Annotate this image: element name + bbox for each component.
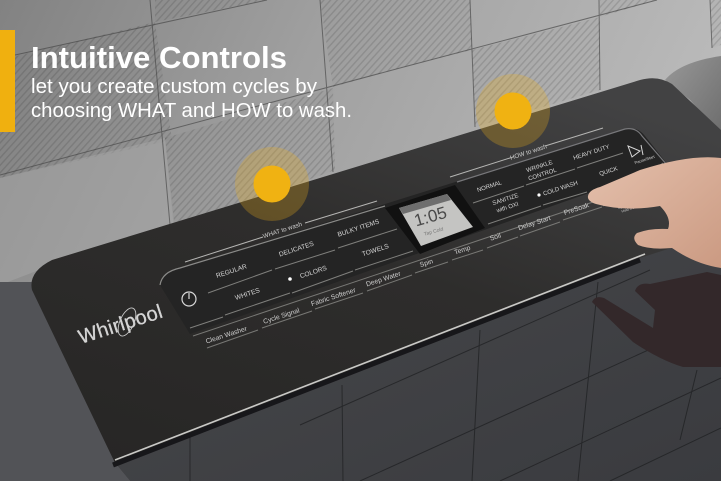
function buttons row: Clean Washer: [205, 325, 249, 346]
pressing hand: [588, 157, 721, 268]
function buttons row: Cycle Signal: [262, 307, 301, 326]
subtitle: [31, 75, 352, 122]
icon: power button: [182, 292, 196, 306]
subtitle: choosing WHAT and HOW to wash.: [31, 99, 352, 122]
HOW to wash section: WRINKLE: [526, 160, 554, 174]
start pause label: Pause/Start: [634, 154, 656, 165]
function buttons row: Delay Start: [517, 215, 552, 232]
WHAT to wash section: REGULAR: [215, 263, 248, 280]
function buttons row: Spin: [419, 258, 434, 269]
wall tiles background: [0, 0, 721, 300]
HOW to wash section: NORMAL: [477, 180, 503, 194]
display time: 1:05: [412, 203, 449, 230]
display bezel: [385, 185, 485, 254]
LCD display: Tap Cold: [423, 226, 444, 238]
function buttons row: Temp: [454, 245, 472, 256]
HOW to wash section: COLD WASH: [543, 181, 579, 197]
control strip recess: [160, 128, 668, 334]
HOW to wash section: CONTROL: [528, 167, 558, 182]
gray washer lid, right: [665, 56, 721, 135]
section heading: WHAT to wash: WHAT to wash: [262, 221, 303, 240]
function buttons row: Hold 3 sec: [621, 204, 639, 214]
washer lower body tiles: [0, 220, 721, 481]
HOW to wash section: with OXI: [495, 202, 520, 215]
title: Intuitive Controls: [31, 40, 287, 75]
function buttons row: [193, 163, 663, 348]
HOW to wash section: [450, 128, 667, 224]
hotspot: what to wash: [235, 147, 309, 221]
Whirlpool logo: Whirlpool: [76, 301, 165, 349]
WHAT to wash section: [160, 201, 413, 328]
yellow accent bar: [0, 30, 15, 132]
WHAT to wash section: TOWELS: [361, 243, 390, 258]
control panel body: [31, 78, 721, 463]
function buttons row: Fabric Softener: [310, 287, 357, 308]
function buttons row: Soil: [489, 232, 502, 243]
hand reflection: [592, 272, 721, 367]
hotspot: how to wash: [476, 74, 550, 148]
panel chrome front edge: [113, 254, 645, 465]
WHAT to wash section: COLORS: [299, 265, 328, 280]
function buttons row: Cycle Signal: [618, 200, 638, 210]
LCD display: [399, 194, 473, 246]
WHAT to wash section: WHITES: [234, 287, 261, 302]
WHAT to wash section: DELICATES: [278, 240, 315, 258]
HOW to wash section: SANITIZE: [492, 193, 519, 207]
HOW to wash section: HEAVY DUTY: [573, 144, 611, 162]
subtitle: let you create custom cycles by: [31, 75, 318, 98]
function buttons row: Deep Water: [365, 270, 402, 288]
WHAT to wash section: BULKY ITEMS: [337, 218, 381, 239]
function buttons row: PreSoak: [563, 202, 591, 217]
icon: start pause: [628, 145, 643, 157]
section heading: HOW to wash: HOW to wash: [509, 143, 548, 162]
HOW to wash section: QUICK: [599, 166, 619, 178]
